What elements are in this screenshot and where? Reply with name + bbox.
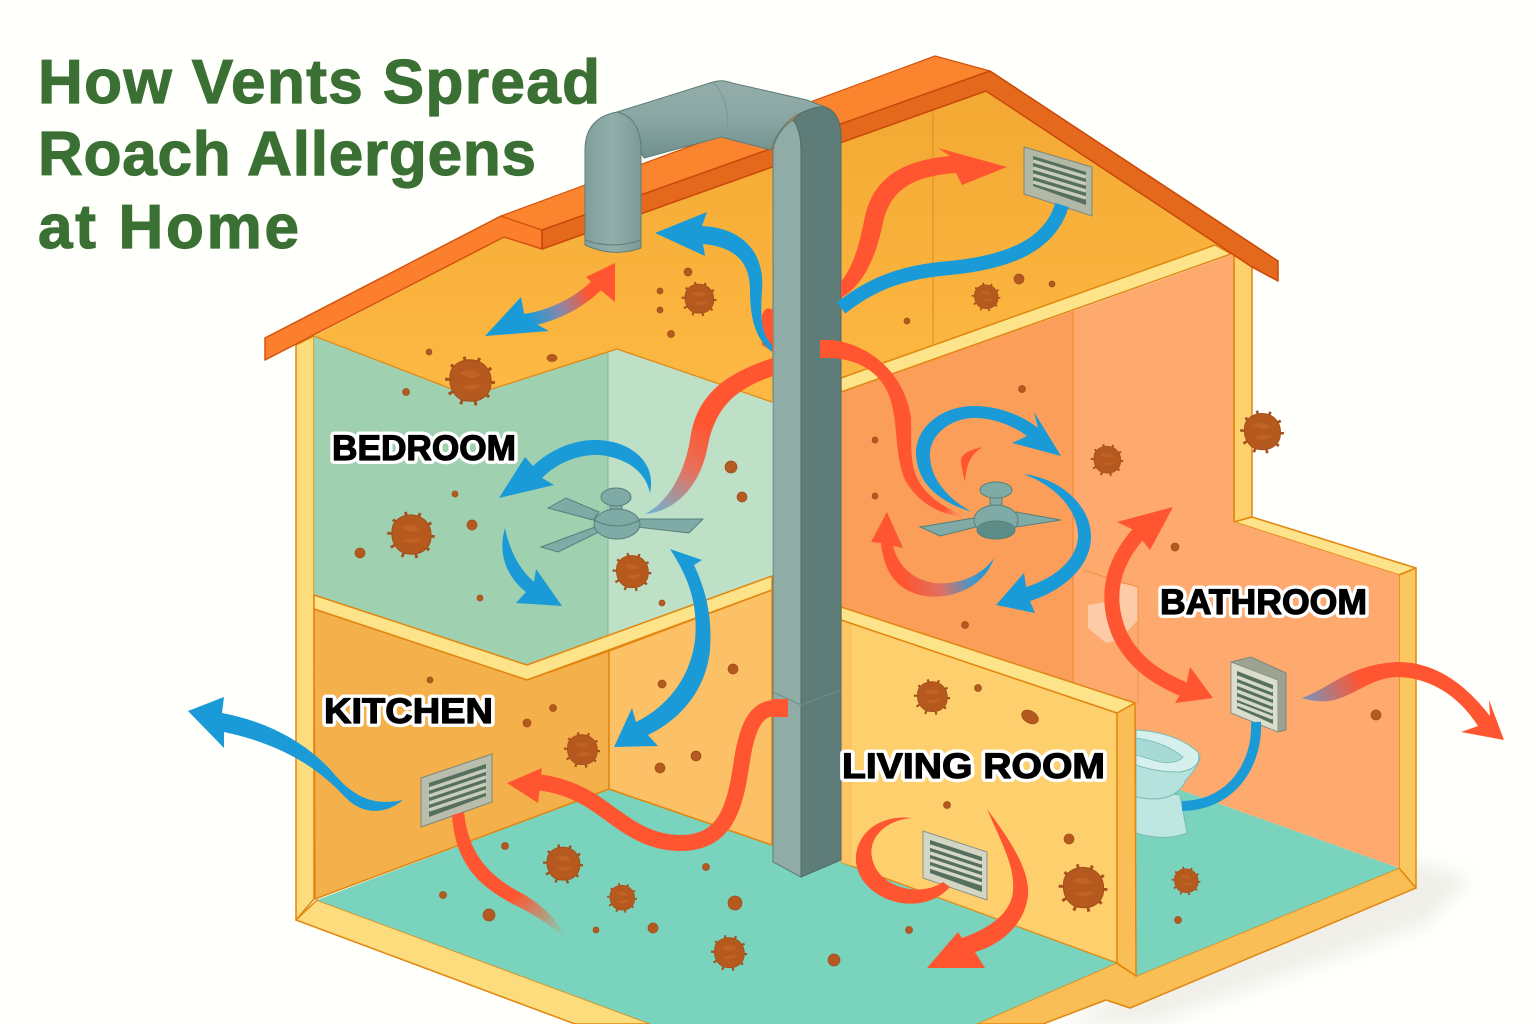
arrow: blue bathroom vent to toilet	[1182, 722, 1256, 806]
right outer strip upper	[1234, 254, 1252, 522]
living room wall end strip	[1117, 703, 1136, 976]
arrow: red living room circular	[856, 818, 950, 904]
arrow: red from duct to living area fan	[820, 340, 965, 517]
duct side face	[793, 107, 841, 877]
duct horizontal section	[617, 81, 825, 158]
living room top ledge	[841, 607, 1135, 713]
title	[38, 48, 600, 262]
roof top surface	[501, 56, 990, 230]
outer left wall edge	[296, 336, 314, 920]
arrow: blue from duct to pipe outlet	[655, 212, 772, 352]
attic floor band right	[841, 245, 1231, 392]
arrow: blue bedroom curl top	[499, 440, 651, 498]
kitchen left wall	[314, 609, 609, 899]
kitchen right wall	[609, 590, 772, 845]
title: How Vents Spread	[38, 48, 600, 117]
arrow: red kitchen vent to floor	[452, 812, 565, 938]
roof left slope	[265, 216, 542, 360]
vent: kitchen	[421, 754, 492, 827]
vent: bathroom	[1231, 657, 1286, 732]
base slab front right	[976, 868, 1416, 1024]
roach allergen clusters	[390, 284, 1281, 969]
arrow: blue bedroom to kitchen	[614, 549, 710, 747]
duct elbow and down pipe	[585, 112, 641, 252]
title: at Home	[38, 193, 299, 262]
label: bathroom: BATHROOM	[1160, 583, 1367, 622]
floor: bathroom	[1136, 774, 1399, 976]
ceiling fan: living area	[920, 482, 1061, 539]
ground shadow	[1060, 862, 1470, 1024]
label: living room: LIVING ROOM	[842, 747, 1105, 786]
duct	[585, 81, 841, 877]
arrow: double-headed attic	[485, 263, 615, 336]
arrow: red double-headed bathroom	[1112, 507, 1213, 703]
ceiling fan: bedroom	[541, 488, 703, 552]
roof fascia	[542, 71, 1278, 281]
label: bathroom: BATHROOM	[1160, 583, 1367, 622]
arrow: red bathroom exit	[1302, 662, 1504, 740]
vent: attic	[1024, 147, 1092, 216]
label: kitchen: KITCHEN	[324, 692, 493, 731]
arrow: red-blue swirl lower left	[871, 512, 994, 597]
attic walls	[314, 91, 1231, 402]
bedroom floor band	[314, 576, 772, 680]
arrow: blue from attic vent to duct	[841, 205, 1062, 308]
vent: living room	[923, 831, 987, 900]
arrow: small red crescent	[961, 447, 983, 482]
arrow: blue swirl over fan	[916, 406, 1061, 512]
living room wall inner edge	[841, 620, 852, 866]
arrow: blue kitchen vent to outside	[188, 697, 403, 811]
allergen particles	[355, 268, 1381, 966]
living room wall	[841, 620, 1117, 963]
label: kitchen: KITCHEN	[324, 692, 493, 731]
base slab front left	[296, 900, 651, 1024]
bedroom right wall	[608, 349, 772, 635]
label: bedroom: BEDROOM	[332, 429, 516, 468]
arrow: red from duct to bedroom fan	[645, 358, 773, 514]
arrow: red into attic vent	[841, 148, 1007, 298]
duct front face	[773, 120, 801, 877]
label: living room: LIVING ROOM	[842, 747, 1105, 786]
arrow: red living room to floor	[927, 809, 1028, 968]
bathroom outer ledge	[1234, 517, 1416, 575]
label: bedroom: BEDROOM	[332, 429, 516, 468]
floor: kitchen and living room	[317, 789, 1116, 1024]
bathroom wall right section	[1073, 254, 1399, 868]
house cutaway structure	[265, 56, 1416, 1024]
toilet	[1136, 730, 1200, 838]
bathroom outer strip right	[1399, 568, 1416, 888]
arrow: red stub behind duct	[762, 308, 773, 352]
faint wall fixture in bathroom	[1083, 570, 1138, 703]
arrow: blue swirl right of fan	[996, 474, 1091, 613]
title: Roach Allergens	[38, 120, 536, 189]
bedroom left wall	[314, 336, 608, 665]
bathroom wall left section	[841, 311, 1073, 683]
arrow: blue bedroom curl lower	[502, 528, 562, 606]
arrow: red from duct to kitchen	[507, 699, 788, 843]
